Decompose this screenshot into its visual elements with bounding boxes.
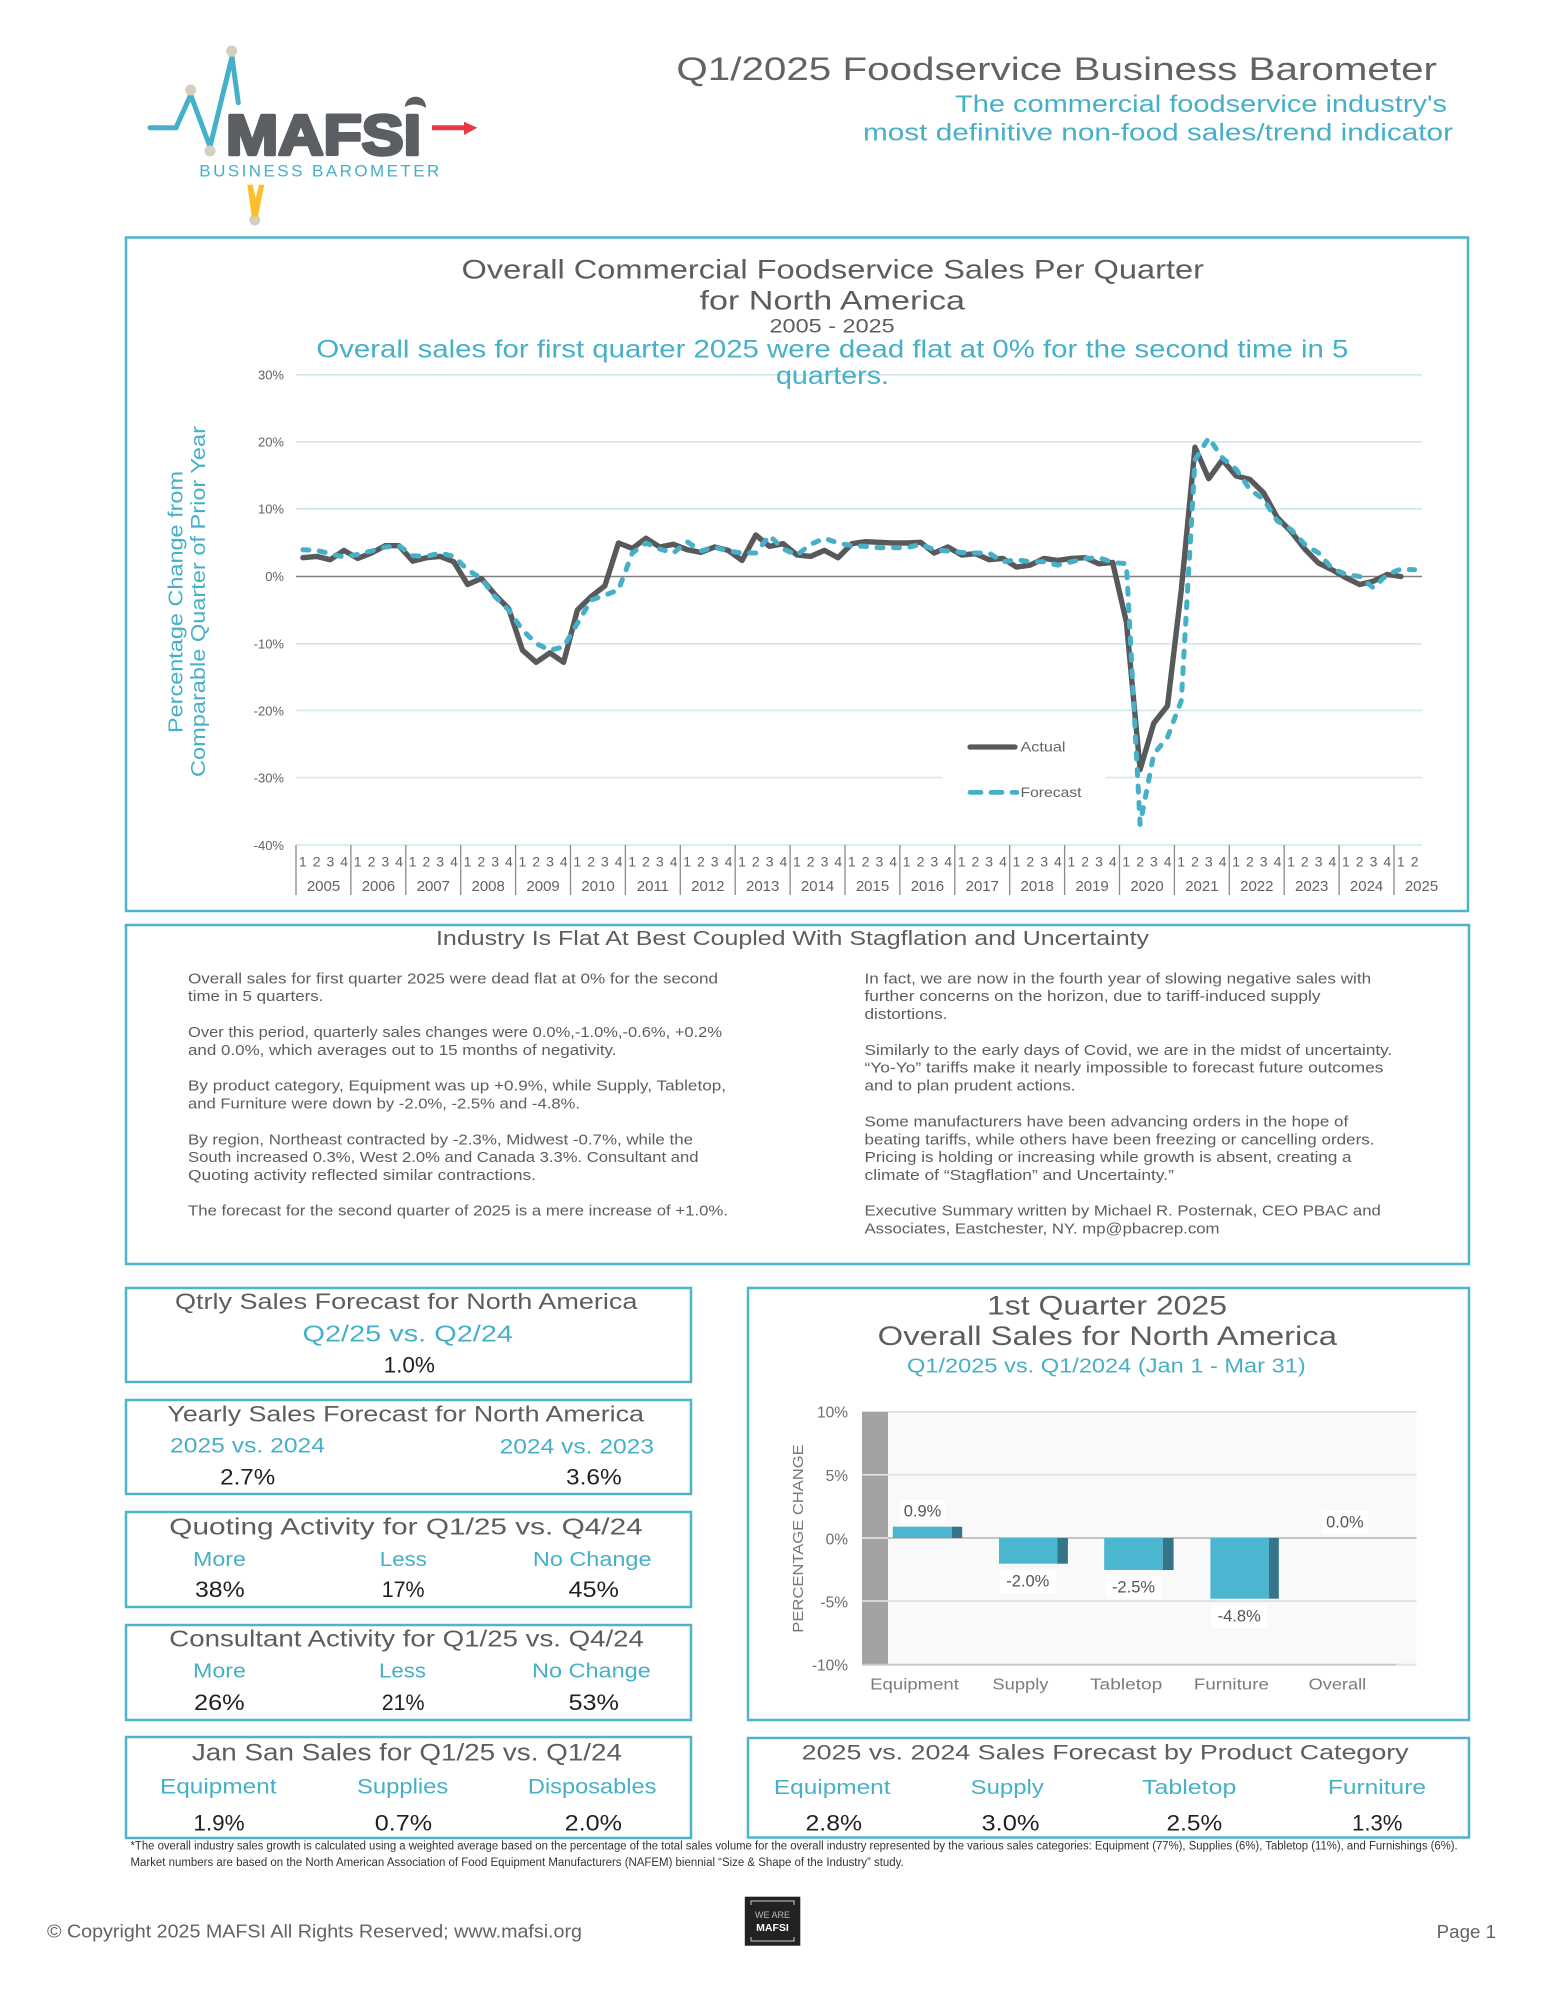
summary right column: Pricing is holding or increasing while growth is absent, creating a (864, 1149, 1352, 1166)
summary heading: Industry Is Flat At Best Coupled With Stagflation and Uncertainty (436, 928, 1149, 950)
summary right column: and to plan prudent actions. (864, 1078, 1076, 1095)
x-axis year labels: 2019 (1075, 878, 1109, 895)
summary right column: climate of “Stagflation” and Uncertainty.” (864, 1167, 1174, 1184)
x-axis year labels: 2021 (1185, 878, 1219, 895)
card: Jan San sales: Disposables (528, 1775, 656, 1799)
summary right column: Similarly to the early days of Covid, we are in the midst of uncertainty. (864, 1042, 1392, 1059)
summary left column: Over this period, quarterly sales changes were 0.0%,-1.0%,-0.6%, +0.2% (188, 1024, 722, 1041)
bar value labels: -2.0% (1006, 1573, 1050, 1591)
card: Jan San sales (126, 1737, 691, 1838)
logo dots (185, 46, 260, 226)
x-axis year labels (307, 878, 1438, 895)
summary left column: By product category, Equipment was up +0.9%, while Supply, Tabletop, (188, 1078, 726, 1095)
card: quarterly sales forecast: 1.0% (384, 1353, 435, 1378)
x-axis year labels: 2024 (1350, 878, 1383, 895)
chart heading (462, 255, 1204, 337)
x-axis quarter labels: 1 2 3 4 (628, 854, 678, 870)
x-axis year labels: 2017 (966, 878, 999, 895)
x-axis year labels: 2016 (911, 878, 944, 895)
bar chart y-axis labels: 0% (826, 1531, 848, 1548)
card: product category forecast: Tabletop (1142, 1777, 1236, 1799)
bar value labels (900, 1500, 1368, 1628)
actual sales line (303, 447, 1401, 770)
card: consultant activity: Less (379, 1660, 426, 1683)
footnote (130, 1840, 1458, 1869)
x-axis quarter labels: 1 2 3 4 (793, 854, 842, 870)
chart heading: Overall Commercial Foodservice Sales Per Quarter (462, 255, 1204, 285)
summary right column: further concerns on the horizon, due to tariff-induced supply (864, 988, 1321, 1005)
logo yellow needle (247, 185, 264, 217)
bar chart category labels: Equipment (870, 1676, 960, 1693)
page title: Q1/2025 Foodservice Business Barometer (676, 51, 1437, 87)
logo i-dot arc (405, 97, 426, 108)
card: Jan San sales: 0.7% (375, 1811, 432, 1836)
card: Jan San sales: Jan San Sales for Q1/25 vs. Q1/24 (192, 1740, 622, 1767)
x-axis year labels: 2025 (1405, 878, 1438, 895)
summary right column: “Yo-Yo” tariffs make it nearly impossible to forecast future outcomes (864, 1060, 1384, 1077)
summary right column: Associates, Eastchester, NY. mp@pbacrep.com (864, 1221, 1220, 1238)
card: yearly sales forecast: Yearly Sales Forecast for North America (167, 1401, 645, 1426)
chart callout: Overall sales for first quarter 2025 were dead flat at 0% for the second time in 5 (316, 336, 1348, 364)
bar chart heading: 1st Quarter 2025 (987, 1290, 1227, 1320)
badge: We Are MAFSI (745, 1897, 800, 1946)
x-axis quarter labels: 1 2 3 4 (518, 854, 568, 870)
bar chart category labels: Overall (1309, 1676, 1366, 1693)
summary left column: Overall sales for first quarter 2025 were dead flat at 0% for the second (188, 970, 718, 987)
panel: executive summary (126, 925, 1469, 1264)
summary left column: South increased 0.3%, West 2.0% and Canada 3.3%. Consultant and (188, 1149, 698, 1166)
x-axis year labels: 2007 (417, 878, 450, 895)
card: consultant activity: More (193, 1660, 246, 1683)
x-axis quarter labels: 1 2 3 4 (1013, 854, 1062, 870)
card: yearly sales forecast (126, 1400, 691, 1494)
x-axis quarter labels: 1 2 3 4 (848, 854, 897, 870)
card: quoting activity: Quoting Activity for Q1/25 vs. Q4/24 (169, 1513, 643, 1539)
page number: Page 1 (1437, 1922, 1496, 1942)
badge: We Are MAFSI: WE ARE (755, 1910, 790, 1920)
panel: first quarter bar chart (748, 1288, 1469, 1720)
summary left column: and 0.0%, which averages out to 15 months of negativity. (188, 1042, 616, 1059)
bar value labels: 0.0% (1326, 1514, 1364, 1532)
card: product category forecast: Supply (971, 1777, 1044, 1799)
y-axis tick labels: -20% (254, 704, 284, 718)
card: product category forecast: 1.3% (1352, 1811, 1402, 1836)
card: Jan San sales: Equipment (160, 1775, 277, 1799)
card: consultant activity: Consultant Activity for Q1/25 vs. Q4/24 (169, 1626, 644, 1652)
card: quoting activity: 17% (382, 1577, 425, 1602)
chart legend: Forecast (1020, 784, 1082, 800)
bar value labels: -2.5% (1112, 1579, 1155, 1597)
bar value labels: -4.8% (1218, 1608, 1261, 1626)
page subtitle: The commercial foodservice industry's (955, 91, 1447, 118)
bar chart y-axis labels (812, 1405, 848, 1675)
footnote: Market numbers are based on the North American Association of Food Equipment Manufacturers (NAFEM) biennial “Size & Shape of the Industry” study. (130, 1857, 904, 1869)
card: yearly sales forecast: 3.6% (566, 1465, 622, 1490)
x-axis quarter labels: 1 2 3 4 (958, 854, 1007, 870)
copyright: © Copyright 2025 MAFSI All Rights Reserved; www.mafsi.org (47, 1921, 582, 1941)
card: yearly sales forecast: 2.7% (220, 1465, 275, 1490)
summary right column: beating tariffs, while others have been freezing or cancelling orders. (864, 1131, 1374, 1148)
x-axis quarter labels: 1 2 3 4 (683, 854, 733, 870)
summary right column (864, 970, 1392, 1238)
summary right column: Some manufacturers have been advancing orders in the hope of (864, 1113, 1349, 1130)
bar chart heading: Overall Sales for North America (878, 1321, 1338, 1351)
x-axis year labels: 2022 (1240, 878, 1273, 895)
bar chart y-axis labels: 5% (826, 1468, 848, 1485)
chart heading: 2005 - 2025 (770, 316, 895, 337)
y-axis tick labels: -30% (254, 770, 284, 786)
bar chart category labels: Supply (992, 1676, 1049, 1693)
x-axis quarter labels: 1 2 3 4 (299, 854, 348, 870)
x-axis quarter labels: 1 2 3 4 (1122, 854, 1172, 870)
card: product category forecast (748, 1738, 1469, 1838)
bar chart category labels: Furniture (1194, 1676, 1269, 1693)
x-axis quarter labels: 1 2 3 4 (1342, 854, 1391, 870)
x-axis quarter labels: 1 2 3 4 (1287, 854, 1337, 870)
x-axis year labels: 2005 (307, 878, 340, 895)
summary right column: Executive Summary written by Michael R. Posternak, CEO PBAC and (864, 1203, 1381, 1220)
logo: MAFSI Business Barometer (150, 46, 477, 226)
chart heading: for North America (700, 285, 966, 315)
card: quoting activity: 45% (568, 1577, 619, 1602)
y-axis tick labels: -40% (254, 838, 284, 853)
logo pulse line (150, 57, 238, 147)
x-axis quarter labels: 1 2 3 4 (1232, 854, 1282, 870)
card: product category forecast: Furniture (1328, 1777, 1426, 1799)
footnote: *The overall industry sales growth is calculated using a weighted average based on the percentage of the total sales volume for the overall industry represented by the various sales categories: Equipment (77%), Supplies (6%), Tabletop (11%), and Furnishings (6%). (130, 1840, 1458, 1852)
x-axis year labels: 2010 (581, 878, 615, 895)
y-axis tick labels (254, 368, 284, 853)
x-axis year labels: 2012 (691, 878, 724, 895)
y-axis title: Percentage Change from (166, 471, 188, 733)
chart legend: Actual (1020, 738, 1066, 754)
card: quoting activity: 38% (195, 1577, 245, 1602)
logo wordmark: MAFSI (226, 104, 421, 168)
x-axis year labels: 2018 (1021, 878, 1054, 895)
x-axis year labels: 2013 (746, 878, 779, 895)
x-axis quarter labels: 1 2 3 4 (464, 854, 513, 870)
summary left column: Quoting activity reflected similar contractions. (188, 1167, 536, 1184)
forecast line (303, 438, 1415, 824)
y-axis tick labels: 20% (258, 434, 284, 450)
bar chart y-axis labels: 10% (817, 1405, 848, 1422)
bar chart y-axis labels: -5% (820, 1594, 848, 1611)
panel: overall sales line chart (126, 238, 1468, 911)
bars (893, 1527, 1279, 1599)
card: product category forecast: 2.8% (806, 1811, 862, 1836)
y-axis title (166, 426, 210, 777)
bar value labels: 0.9% (904, 1503, 942, 1521)
x-axis year labels: 2008 (472, 878, 505, 895)
x-axis year labels: 2020 (1130, 878, 1164, 895)
bar chart y-axis labels: -10% (812, 1658, 848, 1675)
chart callout: quarters. (776, 362, 889, 390)
chart callout (316, 336, 1348, 390)
summary right column: distortions. (864, 1006, 948, 1023)
x-axis quarter labels: 1 2 3 4 (573, 854, 623, 870)
x-axis quarter labels: 1 2 (1397, 854, 1419, 870)
summary left column: The forecast for the second quarter of 2025 is a mere increase of +1.0%. (188, 1203, 728, 1220)
x-axis quarter labels: 1 2 3 4 (903, 854, 952, 870)
card: product category forecast: Equipment (774, 1777, 891, 1799)
y-axis tick labels: 0% (265, 569, 284, 584)
x-axis year labels: 2011 (637, 878, 669, 895)
y-axis title: Comparable Quarter of Prior Year (188, 426, 210, 777)
x-axis ticks (296, 845, 1394, 895)
card: consultant activity: 26% (194, 1690, 245, 1715)
bar chart heading (878, 1290, 1338, 1378)
card: quarterly sales forecast: Q2/25 vs. Q2/24 (302, 1321, 513, 1347)
x-axis quarter labels: 1 2 3 4 (354, 854, 403, 870)
card: yearly sales forecast: 2024 vs. 2023 (500, 1435, 654, 1458)
bar chart heading: Q1/2025 vs. Q1/2024 (Jan 1 - Mar 31) (907, 1356, 1306, 1378)
card: quoting activity: More (193, 1548, 246, 1571)
plot background (862, 1412, 1417, 1665)
page subtitle (863, 91, 1453, 147)
summary left column (188, 970, 728, 1220)
y-axis tick labels: -10% (254, 636, 284, 652)
card: quoting activity: No Change (533, 1548, 652, 1571)
x-axis year labels: 2023 (1295, 878, 1328, 895)
card: Jan San sales: Supplies (357, 1775, 448, 1799)
logo red arrow (432, 122, 477, 135)
x-axis quarter labels: 1 2 3 4 (409, 854, 458, 870)
page subtitle: most definitive non-food sales/trend indicator (863, 120, 1453, 147)
badge: We Are MAFSI: MAFSI (756, 1922, 789, 1934)
grid lines (296, 375, 1422, 845)
chart legend (970, 738, 1082, 800)
bar chart y-axis title: PERCENTAGE CHANGE (790, 1444, 807, 1633)
x-axis year labels: 2014 (801, 878, 834, 895)
card: quarterly sales forecast: Qtrly Sales Forecast for North America (175, 1289, 638, 1314)
summary right column: In fact, we are now in the fourth year of slowing negative sales with (864, 970, 1371, 987)
card: product category forecast: 2025 vs. 2024 Sales Forecast by Product Category (802, 1740, 1409, 1764)
x-axis quarter labels: 1 2 3 4 (738, 854, 788, 870)
x-axis quarter labels: 1 2 3 4 (1177, 854, 1227, 870)
x-axis quarter labels (299, 854, 1419, 870)
card: consultant activity: 53% (568, 1690, 619, 1715)
summary left column: By region, Northeast contracted by -2.3%, Midwest -0.7%, while the (188, 1131, 693, 1148)
card: quoting activity (126, 1512, 691, 1607)
card: yearly sales forecast: 2025 vs. 2024 (170, 1434, 325, 1457)
x-axis quarter labels: 1 2 3 4 (1068, 854, 1117, 870)
bar chart category labels (870, 1676, 1366, 1693)
card: quoting activity: Less (380, 1548, 427, 1571)
card: Jan San sales: 1.9% (193, 1811, 245, 1836)
summary left column: and Furniture were down by -2.0%, -2.5% and -4.8%. (188, 1095, 580, 1112)
x-axis year labels: 2006 (362, 878, 395, 895)
summary left column: time in 5 quarters. (188, 988, 323, 1005)
card: product category forecast: 3.0% (982, 1811, 1040, 1836)
card: quarterly sales forecast (126, 1288, 691, 1382)
card: consultant activity: 21% (382, 1690, 425, 1715)
x-axis year labels: 2015 (856, 878, 889, 895)
bar chart category labels: Tabletop (1090, 1676, 1162, 1693)
logo tagline: BUSINESS BAROMETER (199, 162, 439, 181)
y-axis tick labels: 30% (258, 368, 284, 382)
card: Jan San sales: 2.0% (565, 1811, 622, 1836)
y-axis tick labels: 10% (258, 502, 284, 516)
plot grid lines (862, 1412, 1417, 1601)
card: consultant activity: No Change (532, 1660, 651, 1683)
plot side wall (862, 1412, 888, 1665)
card: product category forecast: 2.5% (1166, 1811, 1222, 1836)
card: consultant activity (126, 1625, 691, 1720)
x-axis year labels: 2009 (526, 878, 560, 895)
